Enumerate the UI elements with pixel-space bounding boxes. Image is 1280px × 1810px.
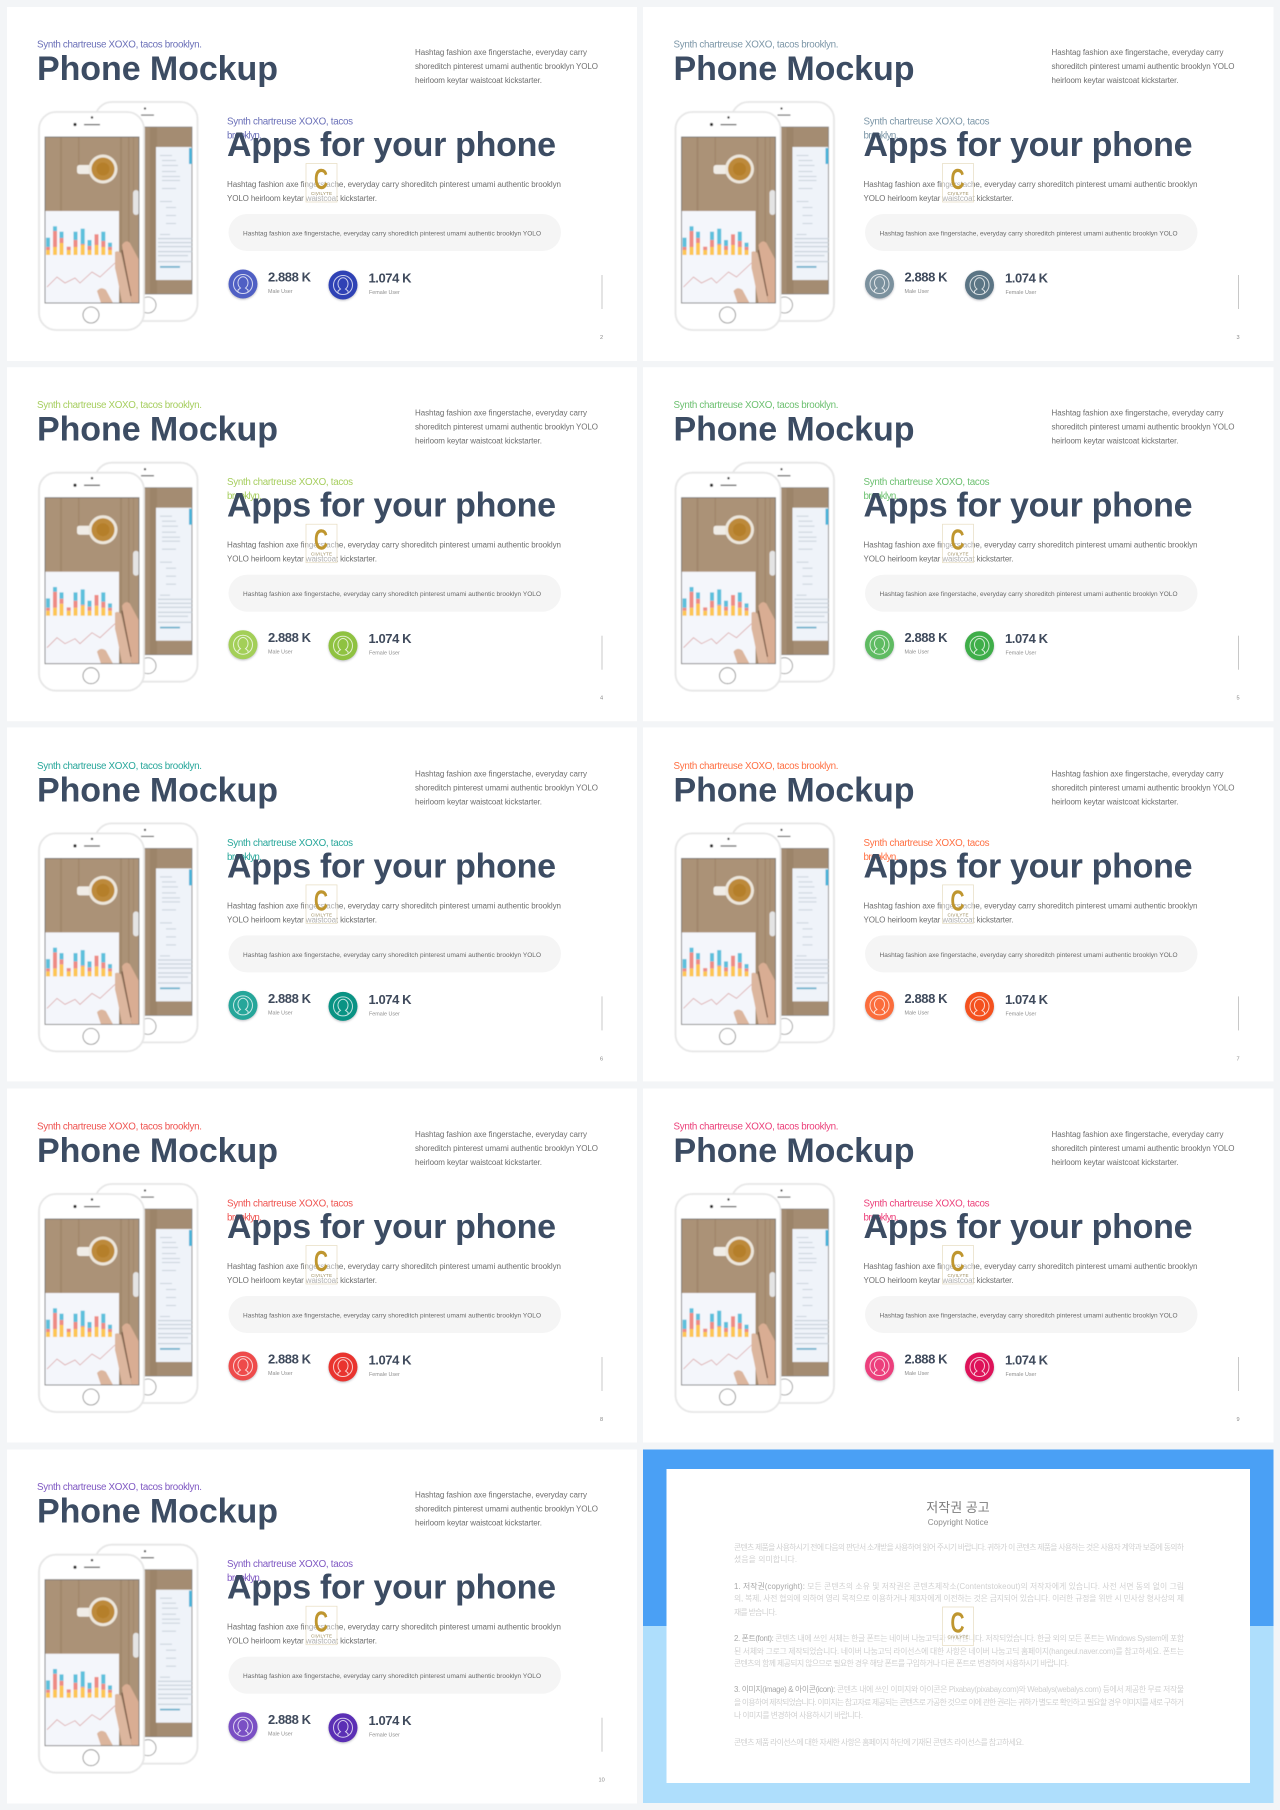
- apps title: Apps for your phone: [227, 1208, 556, 1246]
- stat: female user: [328, 1352, 412, 1382]
- eyebrow: Synth chartreuse XOXO, tacos brooklyn.: [674, 40, 838, 50]
- paragraph 3: 3. 이미지(image) & 아이콘(icon): 콘텐츠 내에 쓰인 이미지와 아이콘은 Pixabay(pixabay.com)와 Webalys(webalys.com) 등에서 제공한 무료 저작물: [734, 1684, 1184, 1694]
- phone mockups: [39, 1184, 198, 1412]
- watermark: C: [950, 1608, 965, 1640]
- side rule: [1238, 636, 1239, 670]
- subheading: brooklyn.: [227, 852, 262, 863]
- paragraph 2: 2. 폰트(font): 콘텐츠 내에 쓰인 서체는 한글 폰트는 네이버 나눔고딕과 서체입니다. 저작되었습니다. 한글 외의 모든 폰트는 Windows System에 포함: [734, 1633, 1184, 1643]
- intro text: Hashtag fashion axe fingerstache, everyday carry: [415, 48, 587, 57]
- subheading: Synth chartreuse XOXO, tacos: [864, 838, 990, 849]
- intro text: shoreditch pinterest umami authentic brooklyn YOLO: [415, 783, 598, 792]
- watermark: C: [950, 525, 965, 557]
- stat: female user: Female User: [369, 1011, 400, 1017]
- phone mockups: [676, 102, 834, 330]
- stat: male user: [865, 991, 948, 1020]
- apps title: Apps for your phone: [227, 847, 556, 885]
- intro text: Hashtag fashion axe fingerstache, everyday carry: [1052, 1130, 1224, 1139]
- intro text: Hashtag fashion axe fingerstache, everyday carry: [415, 1491, 587, 1500]
- phone mockups: [676, 823, 834, 1051]
- paragraph: [227, 901, 561, 924]
- eyebrow: Synth chartreuse XOXO, tacos brooklyn.: [37, 40, 202, 50]
- heading: Phone Mockup: [37, 1132, 278, 1170]
- stat: male user: Male User: [904, 1371, 929, 1377]
- paragraph 1: 의, 복제, 사전 협의에 의하여 영리 목적으로 이용하거나 제3자에게 이전하는 것은 금지되어 있습니다. 이러한 규정을 위반 시 민사상 형사상의 제: [734, 1593, 1184, 1603]
- pill callout: [865, 1296, 1198, 1333]
- paragraph: YOLO heirloom keytar waistcoat kickstarter.: [227, 1637, 377, 1646]
- watermark: [306, 164, 337, 202]
- watermark: CIVILYTE: [311, 1273, 332, 1278]
- intro text: heirloom keytar waistcoat kickstarter.: [1052, 76, 1178, 85]
- pill callout: Hashtag fashion axe fingerstache, everyday carry shoreditch pinterest umami authentic brooklyn YOLO: [880, 1312, 1178, 1320]
- side rule: [602, 636, 603, 670]
- page number: 4: [600, 696, 603, 702]
- stat: male user: Male User: [268, 289, 293, 295]
- stat: male user: 2.888 K: [268, 270, 312, 284]
- paragraph: Hashtag fashion axe fingerstache, everyday carry shoreditch pinterest umami authentic brooklyn: [864, 901, 1198, 910]
- stat: male user: 2.888 K: [268, 1352, 312, 1366]
- stat: female user: 1.074 K: [368, 1352, 412, 1368]
- paragraph: Hashtag fashion axe fingerstache, everyday carry shoreditch pinterest umami authentic brooklyn: [864, 541, 1198, 550]
- stat: female user: 1.074 K: [368, 1713, 412, 1728]
- paragraph: [864, 541, 1198, 564]
- pill callout: [228, 214, 561, 251]
- heading: Phone Mockup: [37, 1493, 278, 1531]
- subheading: brooklyn.: [864, 1212, 898, 1224]
- stat: male user: Male User: [268, 1732, 293, 1738]
- paragraph 3: [734, 1684, 1184, 1720]
- watermark: C: [314, 1246, 328, 1278]
- intro text: shoreditch pinterest umami authentic brooklyn YOLO: [415, 423, 598, 432]
- closing line: 콘텐츠 제품 라이선스에 대한 자세한 사항은 홈페이지 하단에 기재된 콘텐츠 라이선스를 참고하세요.: [734, 1737, 1024, 1747]
- subheading: [227, 1198, 353, 1224]
- subheading: Synth chartreuse XOXO, tacos: [227, 1198, 353, 1210]
- paragraph: Hashtag fashion axe fingerstache, everyday carry shoreditch pinterest umami authentic brooklyn: [864, 1262, 1198, 1271]
- side rule: [602, 996, 603, 1030]
- paragraph: YOLO heirloom keytar waistcoat kickstarter.: [227, 915, 377, 924]
- stat: male user: 2.888 K: [268, 630, 312, 645]
- apps title: Apps for your phone: [864, 847, 1192, 885]
- pill callout: [865, 214, 1198, 251]
- stat: female user: Female User: [369, 1372, 400, 1378]
- stat: male user: 2.888 K: [904, 270, 948, 284]
- stat: male user: Male User: [268, 650, 293, 656]
- watermark: [306, 1606, 337, 1645]
- paragraph: Hashtag fashion axe fingerstache, everyday carry shoreditch pinterest umami authentic brooklyn: [227, 541, 561, 550]
- paragraph: Hashtag fashion axe fingerstache, everyday carry shoreditch pinterest umami authentic brooklyn: [227, 1623, 561, 1632]
- stat: female user: 1.074 K: [1005, 992, 1049, 1007]
- paragraph: YOLO heirloom keytar waistcoat kickstarter.: [864, 915, 1014, 924]
- stat: female user: [965, 992, 1049, 1021]
- stat: female user: Female User: [1006, 1011, 1037, 1017]
- watermark: [942, 164, 974, 202]
- phone mockups: [39, 102, 198, 330]
- watermark: C: [314, 1607, 328, 1639]
- stat: female user: [328, 631, 412, 660]
- watermark: C: [314, 164, 328, 196]
- paragraph: Hashtag fashion axe fingerstache, everyday carry shoreditch pinterest umami authentic brooklyn: [227, 1262, 561, 1271]
- phone mockups: [39, 463, 198, 691]
- stat: male user: [228, 630, 312, 659]
- page number: 2: [600, 335, 603, 341]
- paragraph: [227, 1262, 561, 1285]
- paragraph: [227, 1623, 561, 1646]
- stat: female user: Female User: [369, 290, 400, 296]
- watermark: CIVILYTE: [948, 552, 968, 557]
- stat: female user: 1.074 K: [368, 992, 412, 1007]
- intro text: Hashtag fashion axe fingerstache, everyday carry: [415, 1130, 587, 1139]
- stat: male user: 2.888 K: [904, 991, 948, 1006]
- intro text: [415, 1130, 598, 1167]
- subheading: brooklyn.: [227, 130, 262, 142]
- page number: 6: [600, 1056, 603, 1062]
- heading: Phone Mockup: [674, 1132, 914, 1170]
- stat: female user: Female User: [1006, 290, 1037, 296]
- intro text: [1052, 48, 1234, 85]
- stat: male user: [228, 1352, 312, 1380]
- apps title: Apps for your phone: [864, 487, 1192, 525]
- subheading: [864, 1198, 990, 1224]
- light blue background bottom: [643, 1626, 1274, 1803]
- subheading: [864, 116, 990, 142]
- intro text: Hashtag fashion axe fingerstache, everyday carry: [1052, 409, 1224, 418]
- stat: female user: [965, 631, 1049, 660]
- watermark: CIVILYTE: [948, 1634, 968, 1640]
- intro text: [415, 769, 598, 806]
- phone mockups: [676, 1184, 834, 1412]
- pill callout: Hashtag fashion axe fingerstache, everyday carry shoreditch pinterest umami authentic brooklyn YOLO: [243, 952, 541, 959]
- intro text: shoreditch pinterest umami authentic brooklyn YOLO: [1052, 783, 1234, 792]
- stat: female user: [328, 1713, 412, 1742]
- subheading: [227, 477, 353, 502]
- pill callout: Hashtag fashion axe fingerstache, everyday carry shoreditch pinterest umami authentic brooklyn YOLO: [243, 1312, 541, 1320]
- pill callout: [865, 935, 1198, 972]
- stat: female user: [328, 270, 412, 300]
- intro paragraph: 셨음을 의미합니다.: [734, 1554, 797, 1564]
- watermark: C: [314, 885, 328, 917]
- stat: female user: Female User: [369, 651, 400, 657]
- subheading: Synth chartreuse XOXO, tacos: [864, 116, 990, 128]
- paragraph: Hashtag fashion axe fingerstache, everyday carry shoreditch pinterest umami authentic brooklyn: [227, 901, 561, 910]
- slide 6: teal: [7, 727, 637, 1081]
- watermark: [942, 885, 974, 923]
- stat: female user: 1.074 K: [1005, 1352, 1049, 1368]
- slide 4: lime: [7, 367, 637, 721]
- stat: male user: Male User: [268, 1010, 293, 1016]
- watermark: [306, 524, 337, 563]
- apps title: Apps for your phone: [227, 487, 556, 525]
- side rule: [1238, 1357, 1239, 1391]
- watermark: [942, 524, 974, 563]
- pill callout: Hashtag fashion axe fingerstache, everyday carry shoreditch pinterest umami authentic brooklyn YOLO: [243, 1673, 541, 1680]
- phone mockups: [39, 1545, 198, 1773]
- eyebrow: Synth chartreuse XOXO, tacos brooklyn.: [37, 1122, 202, 1132]
- page number: 9: [1236, 1417, 1240, 1423]
- subheading: brooklyn.: [864, 852, 898, 863]
- stat: male user: [228, 991, 312, 1020]
- phone mockups: [39, 823, 198, 1051]
- pill callout: [228, 575, 561, 612]
- page number: 5: [1236, 696, 1240, 702]
- pill callout: [228, 1657, 561, 1694]
- watermark: CIVILYTE: [311, 1634, 332, 1639]
- stat: male user: [865, 630, 948, 659]
- slide 3: slate: [643, 7, 1274, 361]
- pill callout: Hashtag fashion axe fingerstache, everyday carry shoreditch pinterest umami authentic brooklyn YOLO: [880, 230, 1178, 238]
- paragraph: Hashtag fashion axe fingerstache, everyday carry shoreditch pinterest umami authentic brooklyn: [864, 180, 1198, 189]
- subheading: Synth chartreuse XOXO, tacos: [864, 1198, 990, 1210]
- stat: female user: Female User: [1006, 651, 1037, 657]
- stat: female user: 1.074 K: [1005, 631, 1049, 646]
- paragraph: [864, 1262, 1198, 1285]
- watermark: [306, 885, 337, 923]
- stat: male user: Male User: [904, 1010, 929, 1016]
- paragraph 1: 재를 받습니다.: [734, 1607, 777, 1617]
- page number: 7: [1236, 1056, 1240, 1062]
- watermark: C: [950, 1246, 965, 1278]
- phone mockups: [676, 463, 834, 691]
- watermark: CIVILYTE: [311, 552, 332, 557]
- page number: 3: [1236, 335, 1240, 341]
- paragraph 2: 된 서체와 그로그 제작되었습니다. 네이버 나눔고딕 라이선스에 대한 사항은 네이버 나눔고딕 홈페이지(hangeul.naver.com)를 참고하세요. 폰트는: [734, 1646, 1184, 1656]
- intro text: heirloom keytar waistcoat kickstarter.: [415, 437, 542, 446]
- stat: male user: [865, 1352, 948, 1380]
- subheading: brooklyn.: [227, 1212, 262, 1224]
- slide 8: red: [7, 1088, 637, 1442]
- subheading: brooklyn.: [864, 130, 898, 142]
- paragraph: [864, 180, 1198, 203]
- paragraph: YOLO heirloom keytar waistcoat kickstarter.: [227, 1276, 377, 1285]
- side rule: [602, 275, 603, 309]
- side rule: [1238, 275, 1239, 309]
- apps title: Apps for your phone: [864, 126, 1192, 164]
- paragraph 2: 콘텐츠의 함께 제공되지 않으므로 필요한 경우 해당 폰트를 구입하거나 다른 폰트로 변경하여 사용하시기 바랍니다.: [734, 1658, 1069, 1668]
- pill callout: [228, 935, 561, 972]
- watermark: C: [950, 885, 965, 917]
- heading: Phone Mockup: [37, 771, 278, 809]
- watermark: [942, 1607, 974, 1646]
- watermark: CIVILYTE: [948, 1273, 968, 1278]
- subheading: [864, 838, 990, 863]
- subheading: Synth chartreuse XOXO, tacos: [864, 477, 990, 488]
- eyebrow: Synth chartreuse XOXO, tacos brooklyn.: [674, 400, 838, 411]
- intro text: heirloom keytar waistcoat kickstarter.: [415, 1519, 542, 1528]
- slide 2: indigo: [7, 7, 637, 361]
- heading: Phone Mockup: [37, 50, 278, 88]
- slide 11: copyright notice: [643, 1450, 1274, 1803]
- heading: Phone Mockup: [674, 50, 914, 88]
- paragraph: [864, 901, 1198, 924]
- watermark: C: [950, 164, 965, 196]
- paragraph 1: 1. 저작권(copyright): 모든 콘텐츠의 소유 및 저작권은 콘텐츠제작소(Contentstokeout)의 저작자에게 있습니다. 사전 서면 동의 없이 그림: [734, 1581, 1184, 1591]
- subheading: [227, 838, 353, 863]
- subheading: Synth chartreuse XOXO, tacos: [227, 838, 353, 849]
- pill callout: Hashtag fashion axe fingerstache, everyday carry shoreditch pinterest umami authentic brooklyn YOLO: [880, 591, 1178, 598]
- intro text: [415, 48, 598, 85]
- watermark: CIVILYTE: [948, 912, 968, 917]
- intro text: Hashtag fashion axe fingerstache, everyday carry: [415, 409, 587, 418]
- watermark: CIVILYTE: [948, 191, 968, 196]
- subheading: brooklyn.: [227, 1573, 262, 1584]
- subheading: [227, 1559, 353, 1584]
- intro text: Hashtag fashion axe fingerstache, everyday carry: [1052, 48, 1224, 57]
- stat: female user: [965, 1352, 1049, 1382]
- intro text: [1052, 1130, 1234, 1167]
- paragraph 1: [734, 1581, 1184, 1617]
- intro text: heirloom keytar waistcoat kickstarter.: [1052, 437, 1178, 446]
- notice title: 저작권 공고: [926, 1500, 990, 1515]
- eyebrow: Synth chartreuse XOXO, tacos brooklyn.: [37, 761, 202, 772]
- stat: male user: Male User: [904, 289, 929, 295]
- heading: Phone Mockup: [674, 771, 914, 809]
- eyebrow: Synth chartreuse XOXO, tacos brooklyn.: [37, 1482, 202, 1493]
- pill callout: [865, 575, 1198, 612]
- stat: female user: Female User: [1006, 1372, 1037, 1378]
- paragraph 3: 을 이용하여 제작되었습니다. 이미지는 참고자료 제공되는 콘텐츠로 가공한 것으로 이에 관한 권리는 귀하가 별도로 확인하고 필요할 경우 이미지를 새로 구하거: [734, 1697, 1184, 1707]
- subheading: [864, 477, 990, 502]
- paragraph: [227, 180, 561, 203]
- watermark: CIVILYTE: [311, 912, 332, 917]
- paragraph: Hashtag fashion axe fingerstache, everyday carry shoreditch pinterest umami authentic brooklyn: [227, 180, 561, 189]
- intro text: [1052, 409, 1234, 446]
- intro text: shoreditch pinterest umami authentic brooklyn YOLO: [415, 62, 598, 71]
- stat: female user: [328, 992, 412, 1021]
- watermark: C: [314, 525, 328, 557]
- pill callout: Hashtag fashion axe fingerstache, everyday carry shoreditch pinterest umami authentic brooklyn YOLO: [243, 230, 541, 238]
- eyebrow: Synth chartreuse XOXO, tacos brooklyn.: [674, 761, 838, 772]
- pill callout: Hashtag fashion axe fingerstache, everyday carry shoreditch pinterest umami authentic brooklyn YOLO: [880, 952, 1178, 959]
- subheading: [227, 116, 353, 142]
- subheading: brooklyn.: [864, 491, 898, 502]
- intro text: shoreditch pinterest umami authentic brooklyn YOLO: [415, 1505, 598, 1514]
- notice subtitle: Copyright Notice: [928, 1518, 989, 1527]
- page number: 8: [600, 1417, 603, 1423]
- intro text: heirloom keytar waistcoat kickstarter.: [1052, 797, 1178, 806]
- stat: female user: 1.074 K: [368, 631, 412, 646]
- side rule: [602, 1357, 603, 1391]
- stat: male user: [228, 270, 312, 298]
- slide 10: purple: [7, 1450, 637, 1804]
- intro text: heirloom keytar waistcoat kickstarter.: [415, 1158, 542, 1167]
- slide 5: green: [643, 367, 1274, 721]
- eyebrow: Synth chartreuse XOXO, tacos brooklyn.: [37, 400, 202, 411]
- subheading: brooklyn.: [227, 491, 262, 502]
- side rule: [602, 1718, 603, 1752]
- stat: male user: Male User: [904, 650, 929, 656]
- paragraph: [227, 541, 561, 564]
- watermark: [942, 1246, 974, 1284]
- eyebrow: Synth chartreuse XOXO, tacos brooklyn.: [674, 1122, 838, 1132]
- stat: female user: Female User: [369, 1733, 400, 1739]
- stat: female user: 1.074 K: [368, 270, 412, 286]
- watermark: CIVILYTE: [311, 191, 332, 196]
- intro text: shoreditch pinterest umami authentic brooklyn YOLO: [415, 1144, 598, 1153]
- intro text: Hashtag fashion axe fingerstache, everyday carry: [1052, 769, 1224, 778]
- paragraph: YOLO heirloom keytar waistcoat kickstarter.: [227, 194, 377, 203]
- paragraph: YOLO heirloom keytar waistcoat kickstarter.: [227, 555, 377, 564]
- intro text: Hashtag fashion axe fingerstache, everyday carry: [415, 769, 587, 778]
- intro text: shoreditch pinterest umami authentic brooklyn YOLO: [1052, 423, 1234, 432]
- intro text: [1052, 769, 1234, 806]
- stat: female user: [965, 270, 1049, 300]
- intro text: heirloom keytar waistcoat kickstarter.: [415, 797, 542, 806]
- paragraph 2: [734, 1633, 1184, 1668]
- stat: male user: Male User: [268, 1371, 293, 1377]
- slide 7: orange: [643, 727, 1274, 1081]
- white panel: [666, 1469, 1250, 1783]
- intro text: heirloom keytar waistcoat kickstarter.: [415, 76, 542, 85]
- paragraph: YOLO heirloom keytar waistcoat kickstarter.: [864, 555, 1014, 564]
- intro paragraph: [734, 1542, 1184, 1564]
- stat: male user: 2.888 K: [268, 991, 312, 1006]
- stat: female user: 1.074 K: [1005, 270, 1049, 286]
- heading: Phone Mockup: [674, 411, 914, 449]
- slide 9: pink: [643, 1088, 1274, 1442]
- stat: male user: 2.888 K: [268, 1712, 312, 1727]
- intro text: heirloom keytar waistcoat kickstarter.: [1052, 1158, 1178, 1167]
- apps title: Apps for your phone: [864, 1208, 1192, 1246]
- intro text: shoreditch pinterest umami authentic brooklyn YOLO: [1052, 62, 1234, 71]
- pill callout: [228, 1296, 561, 1333]
- pill callout: Hashtag fashion axe fingerstache, everyday carry shoreditch pinterest umami authentic brooklyn YOLO: [243, 591, 541, 598]
- intro text: [415, 1491, 598, 1528]
- paragraph: YOLO heirloom keytar waistcoat kickstarter.: [864, 194, 1014, 203]
- stat: male user: [228, 1712, 312, 1741]
- page number: 10: [598, 1778, 605, 1784]
- stat: male user: [865, 270, 948, 298]
- watermark: [306, 1246, 337, 1284]
- intro text: shoreditch pinterest umami authentic brooklyn YOLO: [1052, 1144, 1234, 1153]
- heading: Phone Mockup: [37, 411, 278, 449]
- subheading: Synth chartreuse XOXO, tacos: [227, 1559, 353, 1570]
- intro paragraph: 콘텐츠 제품을 사용하시기 전에 다음의 판단서 소개받을 사용하여 읽어 주시기 바랍니다. 귀하가 이 콘텐츠 제품을 사용하는 것은 사용자 계약과 보증에 동의하: [734, 1542, 1184, 1552]
- stat: male user: 2.888 K: [904, 1352, 948, 1366]
- subheading: Synth chartreuse XOXO, tacos: [227, 477, 353, 488]
- apps title: Apps for your phone: [227, 1569, 556, 1607]
- stat: male user: 2.888 K: [904, 630, 948, 645]
- paragraph 3: 나 이미지를 변경하여 사용하시기 바랍니다.: [734, 1710, 863, 1720]
- side rule: [1238, 996, 1239, 1030]
- blue background top: [643, 1450, 1274, 1626]
- subheading: Synth chartreuse XOXO, tacos: [227, 116, 353, 128]
- intro text: [415, 409, 598, 446]
- paragraph: YOLO heirloom keytar waistcoat kickstarter.: [864, 1276, 1014, 1285]
- apps title: Apps for your phone: [227, 126, 556, 164]
